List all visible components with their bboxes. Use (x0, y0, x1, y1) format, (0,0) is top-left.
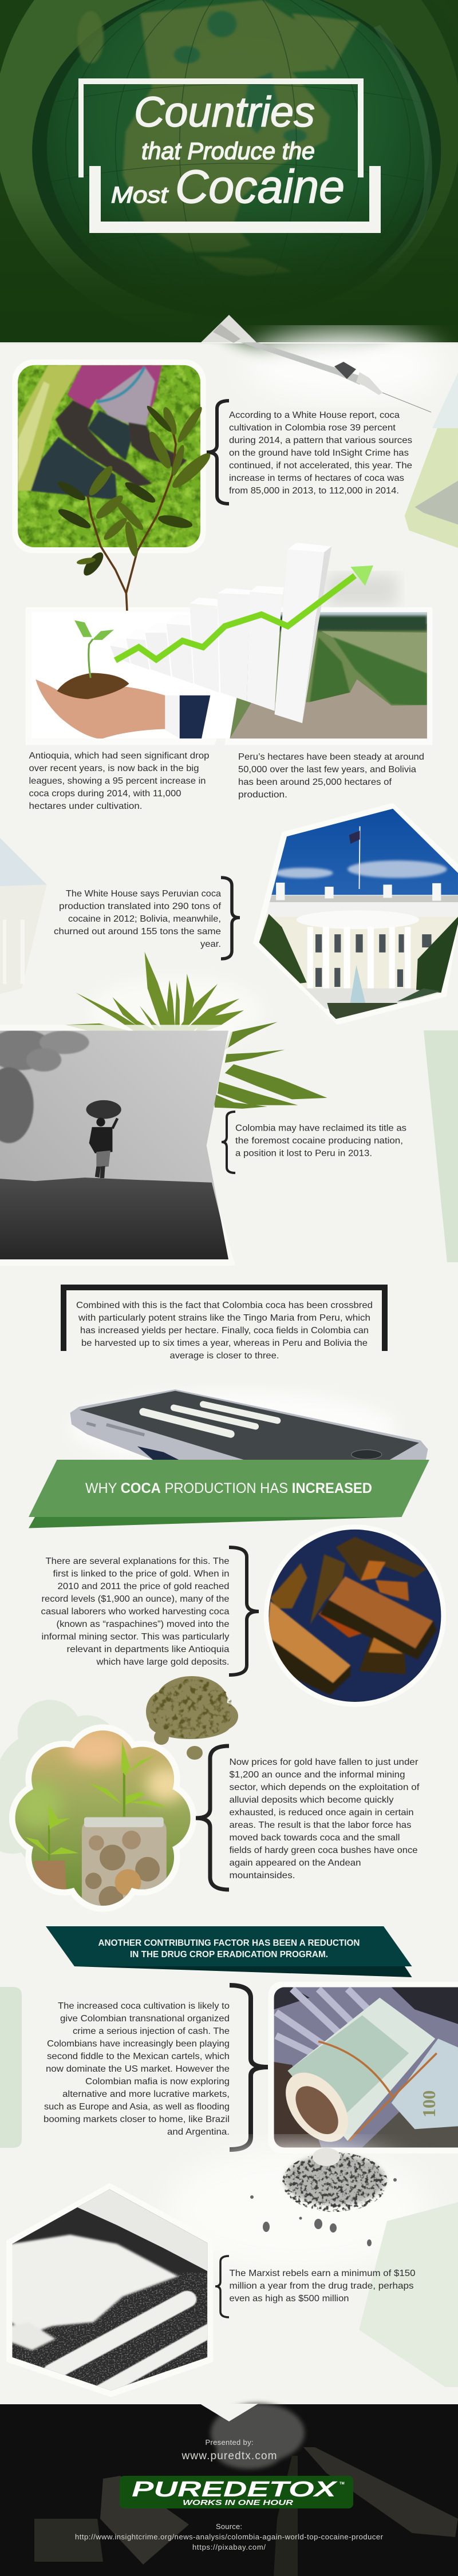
money roll (286, 1998, 437, 2142)
text: Colombia title (235, 1123, 406, 1159)
text: Antioquia (29, 751, 210, 811)
faded tea photo at right edge (405, 373, 458, 548)
footer background (0, 2404, 458, 2576)
text: Peruvian coca production: production translated into 290 tons of (59, 902, 222, 911)
text: Colombia title: a position it lost to Peru in 2013. (235, 1148, 372, 1159)
banner: eradication program (46, 1926, 412, 1977)
panel: person carrying sack (0, 1025, 235, 1266)
text: injection of cash: give Colombian transnational organized (60, 2014, 230, 2024)
banner ribbon (29, 1460, 429, 1517)
text: Marxist rebels: The Marxist rebels earn a minimum of $150 (229, 2269, 416, 2278)
text: gold prices fallen: fields of hardy green coca bushes have once (229, 1846, 418, 1855)
text: Antioquia: leagues, showing a 95 percent increase in (29, 776, 206, 786)
text: Marxist rebels: even as high as $500 million (229, 2294, 349, 2304)
photo frame (12, 359, 206, 553)
faded green strip at right (424, 1030, 458, 1262)
text: crossbred strains: Combined with this is the fact that Colombia coca has been crossbred (76, 1301, 373, 1310)
frame right (224, 607, 432, 745)
photo frame (6, 2183, 213, 2397)
text: injection of cash: Colombian mafia is now exploring (85, 2077, 230, 2087)
footer photo: syringe (274, 2456, 298, 2576)
ash glow (166, 2147, 429, 2273)
logo (120, 2476, 353, 2508)
syringe glow (246, 332, 441, 401)
text: Peruvian coca production: churned out around 155 tons the same (54, 927, 221, 937)
header bottom fade (0, 0, 458, 343)
title: that Produce the (141, 137, 315, 164)
text: Peruvian coca production: year. (200, 939, 221, 949)
"100" note mark: 100 (419, 2091, 439, 2117)
hand photo (35, 621, 236, 738)
syringe hub (356, 372, 382, 395)
faded White House at left edge (0, 838, 47, 994)
banner: why coca production has increased (29, 1460, 429, 1528)
syringe barrel (240, 342, 366, 385)
text: Peruvian coca production (54, 889, 222, 949)
text: injection of cash: alternative and more lucrative markets, (62, 2089, 230, 2099)
growth arrow (116, 566, 373, 661)
text: gold prices fallen: Now prices for gold have fallen to just under (229, 1757, 418, 1767)
panel: gold bars photo (263, 1524, 447, 1707)
cannabis leaves (66, 952, 327, 1109)
banner text: IN THE DRUG CROP ERADICATION PROGRAM. (130, 1950, 328, 1959)
photo (9, 2188, 213, 2392)
footer notch (200, 2404, 258, 2421)
text: Marxist rebels: million a year from the drug trade, perhaps (229, 2281, 413, 2291)
text: Antioquia: over recent years, is now back in the big (29, 764, 199, 773)
text: price of gold: first is linked to the price of gold. When in (53, 1569, 229, 1579)
syringe tip in notch (213, 324, 240, 343)
title (111, 88, 345, 213)
pale scalloped background shape (0, 1700, 135, 1869)
panel: powder hexagon photo (6, 2183, 213, 2397)
coca plant (56, 404, 214, 611)
logo: WORKS IN ONE HOUR (183, 2498, 294, 2507)
globe land masses (77, 0, 360, 276)
jar paragraph brace (196, 1746, 229, 1890)
text: price of gold: casual laborers who worked harvesting coca (41, 1607, 230, 1617)
footer photo: powder (211, 2403, 305, 2469)
photo frame (9, 1724, 196, 1912)
lower cluster (213, 1022, 327, 1109)
text: White House report (229, 410, 412, 496)
text: injection of cash: The increased coca cultivation is likely to (58, 2001, 230, 2011)
syringe (213, 324, 441, 412)
photo (273, 1987, 458, 2154)
title: Cocaine (175, 161, 345, 213)
text: injection of cash: such as Europe and Asia, as well as flooding (44, 2102, 230, 2112)
text: Peru: has been around 25,000 hectares of (238, 777, 392, 787)
title frame upper (78, 78, 364, 177)
text: injection of cash: booming markets closer to home, like Brazil (44, 2115, 230, 2124)
banner heading: WHY COCA PRODUCTION HAS INCREASED (85, 1480, 372, 1496)
footer photo: lighter (34, 2519, 103, 2562)
bar chart (110, 543, 331, 723)
panel: White House photo (251, 801, 458, 1025)
photo frame (253, 803, 458, 1025)
first paragraph brace (207, 401, 229, 504)
tree (0, 1029, 89, 1143)
photo frame (0, 1025, 235, 1266)
powder lines (143, 1404, 278, 1434)
syringe needle (382, 393, 431, 412)
text: price of gold: 2010 and 2011 the price of gold reached (57, 1582, 230, 1591)
text: crossbred strains: has increased yields per hectare. Finally, coca fields in Colombia can (80, 1326, 369, 1336)
photo (0, 1029, 231, 1262)
text: price of gold (41, 1556, 230, 1667)
website: www.puredtx.com (181, 2450, 277, 2462)
text: crossbred strains: be harvested up to six times a year, whereas in Peru and Bolivia the (81, 1338, 368, 1348)
text: price of gold: relevant in departments like Antioquia (66, 1645, 230, 1654)
chart shadow (327, 574, 397, 606)
text: gold prices fallen: moved back towards coca and the small (229, 1833, 400, 1843)
home button (352, 1450, 382, 1459)
text: crossbred strains: average is closer to three. (169, 1351, 279, 1361)
text: gold prices fallen (229, 1757, 420, 1880)
text: Peruvian coca production: The White House says Peruvian coca (66, 889, 221, 899)
title: Most (111, 183, 169, 208)
text: White House report: on the ground have told InSight Crime has (229, 448, 409, 458)
logo: TM (339, 2482, 345, 2486)
phone screen (80, 1391, 419, 1464)
banner fold (29, 1517, 402, 1528)
globe meridian rim (377, 26, 428, 272)
text: White House report: from 85,000 in 2013, to 112,000 in 2014. (229, 486, 399, 496)
globe shadow (32, 0, 441, 318)
banner fold (74, 1966, 412, 1977)
text: gold prices fallen: exhausted, is reduced once again in certain (229, 1808, 413, 1818)
ground (0, 1178, 231, 1260)
ash fragments (250, 2148, 397, 2246)
pale hexagon behind ash and text (359, 2202, 458, 2387)
text: Antioquia: Antioquia, which had seen significant drop (29, 751, 210, 761)
panel: rolled dollars photo (268, 1982, 458, 2154)
photo frame (264, 1524, 446, 1707)
text: crossbred strains: with particularly potent strains like the Tingo Maria from Peru, which (78, 1313, 370, 1323)
upper cluster (66, 952, 244, 1035)
text: Antioquia: hectares under cultivation. (29, 801, 142, 811)
Colombia paragraph brace (222, 1112, 235, 1173)
photo (263, 1528, 447, 1704)
panel: plant and coin jar photo (9, 1724, 196, 1912)
text: injection of cash: and Argentina. (167, 2127, 230, 2137)
phone body (70, 1389, 428, 1464)
panel: tea picker photo (12, 359, 206, 553)
text: injection of cash: second fiddle to the Mexican cartels, which (47, 2052, 230, 2061)
text: White House report: increase in terms of hectares of coca was (229, 473, 404, 483)
globe grid lines (50, 0, 427, 309)
logo: PUREDETOX (132, 2478, 338, 2502)
gold paragraph brace (229, 1547, 259, 1675)
photo (251, 801, 458, 1019)
text: price of gold: informal mining sector. This was particularly (41, 1632, 229, 1642)
text: White House report: cultivation in Colombia rose 39 percent (229, 423, 396, 433)
globe map detail (174, 11, 307, 143)
text: injection of cash: crime a serious injection of cash. The (73, 2026, 230, 2036)
text: gold prices fallen: again appeared on the Andean (229, 1858, 361, 1868)
text: Peru: production. (238, 790, 287, 800)
Marxist paragraph brace (215, 2256, 229, 2317)
footer photo: spoon (303, 2447, 458, 2537)
triangle notch (200, 315, 257, 343)
title: Countries (134, 88, 315, 136)
text: Colombia title: the foremost cocaine producing nation, (235, 1136, 403, 1146)
footer panel (0, 2403, 458, 2576)
presented by: Presented by: (205, 2438, 253, 2447)
phone with lines of powder (70, 1389, 428, 1467)
text: price of gold: There are several explanations for this. The (46, 1556, 230, 1566)
text: gold prices fallen: $1,200 an ounce and the informal mining (229, 1770, 405, 1780)
header background (0, 0, 458, 343)
text: Peru (238, 752, 424, 800)
photo (11, 1726, 196, 1911)
text: Antioquia: coca crops during 2014, with 11,000 (29, 789, 181, 799)
plant leaves (56, 404, 214, 579)
text: price of gold: record levels ($1,900 an ounce), many of the (41, 1594, 230, 1604)
text: crossbred strains (76, 1301, 373, 1361)
plant stems (88, 431, 176, 611)
White House paragraph brace (221, 878, 240, 959)
banner ribbon (46, 1926, 412, 1966)
globe stand ring (0, 0, 458, 342)
phone glow (70, 1391, 397, 1467)
ash pile (166, 2147, 458, 2387)
pale green tab at left (0, 1987, 22, 2148)
title frame lower (89, 166, 381, 233)
seedlings (25, 1741, 169, 1860)
banner text: ANOTHER CONTRIBUTING FACTOR HAS BEEN A REDUCTION (98, 1938, 360, 1948)
text: gold prices fallen: areas. The result is that the labor force has (229, 1820, 411, 1830)
source (75, 2522, 384, 2551)
text: injection of cash (44, 2001, 230, 2137)
soft glow under leaves (88, 977, 263, 1047)
text: White House report: According to a White House report, coca (229, 410, 400, 420)
frame left (26, 607, 257, 745)
text: Colombia title: Colombia may have reclaimed its title as (235, 1123, 406, 1133)
source: https://pixabay.com/ (192, 2543, 266, 2551)
text: price of gold: which have large gold deposits. (96, 1657, 229, 1667)
cannabis buds (146, 1676, 238, 1760)
photo frame (268, 1982, 458, 2154)
text: Peru: 50,000 over the last few years, and Bolivia (238, 765, 416, 775)
header panel with globe (0, 0, 458, 361)
text: gold prices fallen: sector, which depends on the exploitation of (229, 1783, 420, 1792)
globe sphere (47, 0, 429, 309)
combined text box frame (61, 1285, 388, 1351)
panel: hand and field chart (26, 543, 432, 745)
text: gold prices fallen: mountainsides. (229, 1871, 295, 1880)
field photo (230, 612, 427, 738)
text: Peru: Peru’s hectares have been steady at around (238, 752, 424, 762)
text: price of gold: (known as “raspachines”) moved into the (56, 1619, 230, 1629)
text: Marxist rebels (229, 2269, 416, 2304)
text: gold prices fallen: alluvial deposits which become quickly (229, 1795, 394, 1805)
person (86, 1100, 121, 1178)
text: White House report: during 2014, a pattern that various sources (229, 436, 412, 445)
banner text (98, 1938, 360, 1959)
phone buttons (86, 1422, 145, 1436)
header bottom line (0, 342, 458, 343)
text: injection of cash: Colombians have increasingly been playing (47, 2039, 230, 2049)
source: Source: (216, 2522, 242, 2531)
text: Peruvian coca production: cocaine in 2012; Bolivia, meanwhile, (68, 914, 221, 924)
photo (18, 365, 200, 547)
text: injection of cash: now dominate the US market. However the (46, 2064, 230, 2074)
text: White House report: continued, if not accelerated, this year. The (229, 461, 412, 471)
source: http://www.insightcrime.org/news-analysis/colombia-again-world-top-cocaine-producer (75, 2532, 384, 2541)
cash paragraph brace (230, 1985, 268, 2150)
